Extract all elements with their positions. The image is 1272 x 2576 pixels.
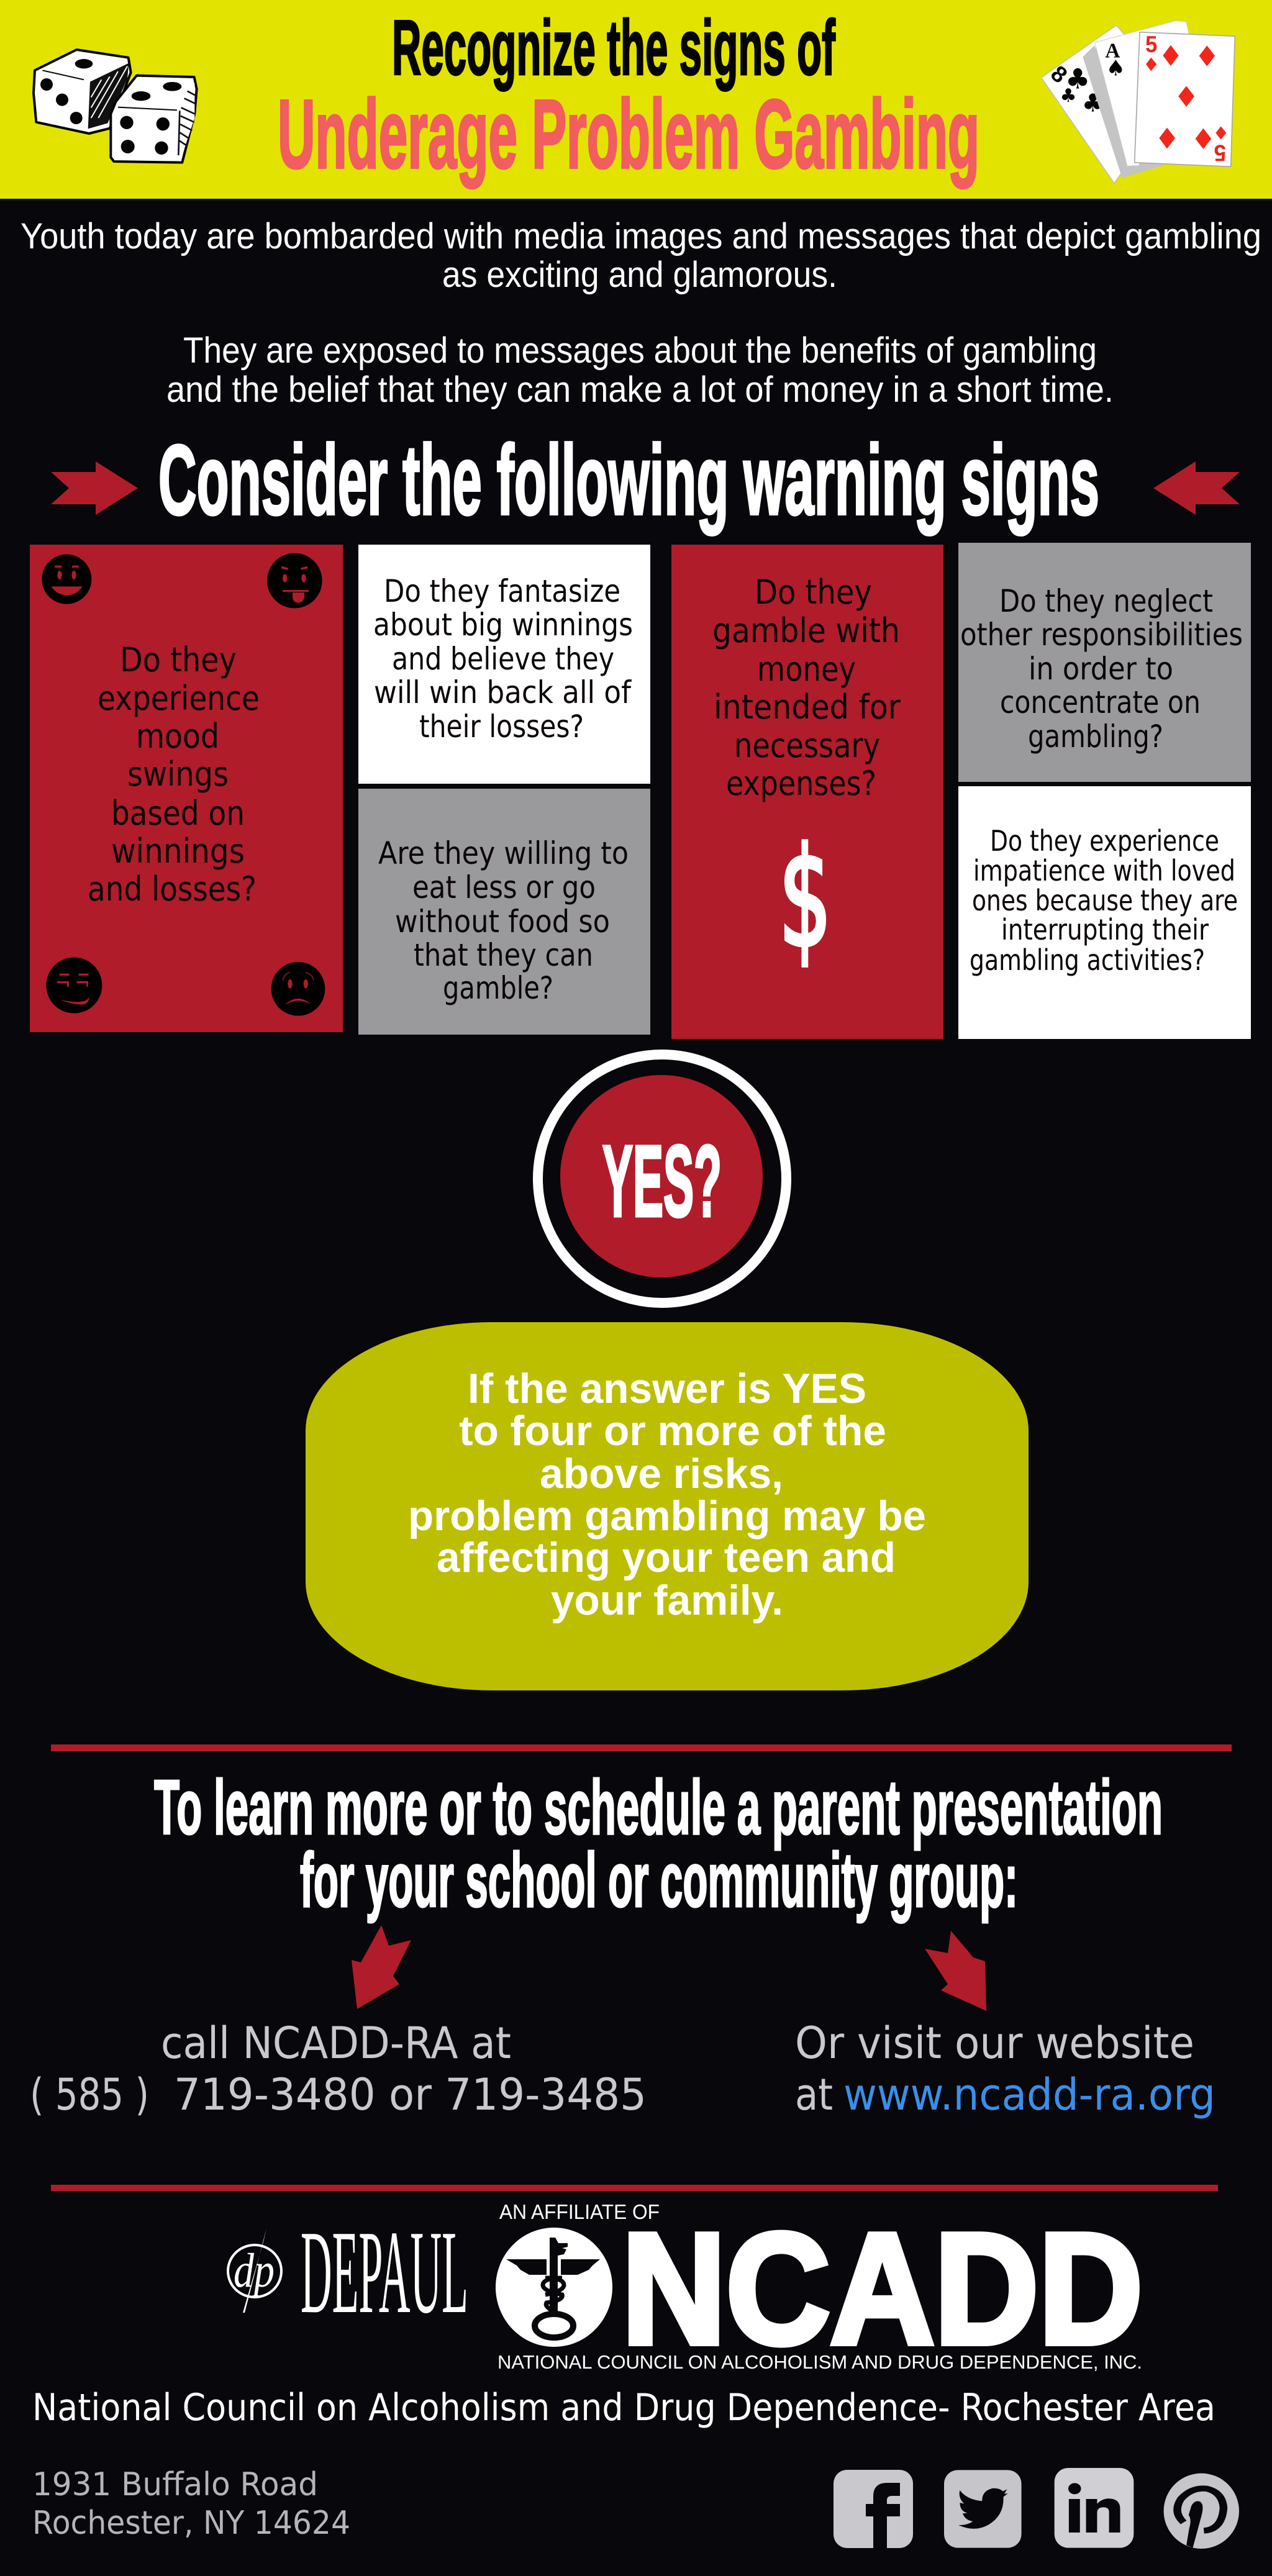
contact: website: at [795, 2069, 833, 2120]
icon: dice [34, 50, 197, 163]
question text: experience [98, 679, 260, 718]
question text [712, 573, 901, 803]
logo: NCADD: NCADD [622, 2200, 1143, 2377]
icon: playing cards [1042, 20, 1235, 183]
icon: twitter [944, 2470, 1022, 2548]
intro text block [20, 216, 1261, 410]
question text: about big winnings [373, 607, 633, 643]
icon: playing cards: 8 [1046, 60, 1072, 88]
question text [373, 573, 633, 745]
question text: will win back all of [374, 674, 632, 710]
YES badge [538, 1054, 786, 1303]
logo: DePaul [228, 2206, 468, 2338]
question text: Do they experience [990, 824, 1219, 858]
question text: necessary [734, 726, 880, 765]
callout: four or more risks [306, 1322, 1029, 1690]
callout text: above risks, [540, 1450, 783, 1497]
callout text: problem gambling may be [408, 1492, 926, 1540]
header banner [0, 0, 1272, 199]
arrow: heading right [1153, 461, 1240, 515]
icon: playing cards: ♠ [1106, 57, 1125, 81]
icon: playing cards: 5 [1145, 31, 1157, 57]
title line: Recognize the signs of: Recognize the signs of [392, 5, 835, 91]
icon: pinterest [1164, 2474, 1239, 2549]
question text [970, 824, 1238, 977]
question text: money [757, 650, 856, 689]
question text: Do they neglect [999, 583, 1213, 619]
question text: gambling? [1028, 719, 1163, 755]
icon: tongue out face [267, 553, 322, 608]
question text: interrupting their [1001, 913, 1209, 946]
contact: website: www.ncadd-ra.org [843, 2069, 1215, 2120]
icon: facebook [834, 2470, 913, 2548]
question text: gamble with [712, 611, 900, 650]
icon: laughing face [42, 555, 91, 604]
question text: without food so [395, 904, 610, 940]
address [32, 2466, 350, 2542]
panel: go without food [358, 789, 650, 1035]
heading: learn more [154, 1765, 1163, 1923]
logo: NCADD: AN AFFILIATE OF [499, 2200, 660, 2223]
panel: money for necessary expenses [671, 545, 943, 1039]
contact: phone: ( 585 ) [30, 2069, 149, 2120]
address: Rochester, NY 14624 [32, 2505, 350, 2542]
question text: and believe they [392, 641, 614, 677]
icon: dollar sign: $ [779, 819, 832, 977]
icon: smirking face [46, 958, 102, 1014]
question text [960, 583, 1243, 755]
question text [378, 835, 629, 1006]
icon: playing cards: A [1105, 40, 1120, 63]
logo: DePaul: dp [234, 2243, 275, 2297]
emblem: key and caduceus [496, 2228, 612, 2347]
question text: mood [136, 717, 219, 756]
question text: their losses? [419, 709, 584, 745]
arrow: down to phone [352, 1925, 411, 2009]
icon: playing cards: ♣ [1082, 89, 1104, 117]
question text: that they can [414, 937, 593, 973]
callout text: affecting your teen and [437, 1534, 896, 1581]
icon: playing cards: ♣ [1065, 63, 1090, 96]
question text: concentrate on [1000, 684, 1201, 720]
contact: phone [30, 2018, 647, 2120]
arrow: down to website [925, 1931, 986, 2011]
callout text [408, 1365, 926, 1624]
callout text: your family. [551, 1577, 783, 1624]
question text: based on [111, 794, 245, 833]
icon: playing cards: 5 [1214, 140, 1226, 166]
question text: and losses? [88, 869, 257, 909]
address: 1931 Buffalo Road [32, 2466, 318, 2503]
question text: Do they [755, 573, 872, 612]
question text: expenses? [726, 764, 876, 803]
panel: mood swings [30, 545, 343, 1032]
question text: gambling activities? [970, 943, 1205, 977]
contact: phone: call NCADD-RA at [161, 2018, 511, 2069]
question text [88, 640, 260, 909]
question text: eat less or go [412, 869, 596, 905]
arrow: heading left [51, 461, 138, 515]
panel: impatience with loved ones [958, 786, 1251, 1039]
question text: winnings [111, 832, 245, 871]
question text: in order to [1029, 651, 1173, 687]
YES badge: YES? [602, 1124, 722, 1238]
question text: swings [127, 755, 229, 794]
icon: linkedin [1055, 2468, 1133, 2548]
callout text: to four or more of the [459, 1407, 886, 1454]
question text: Are they willing to [378, 835, 629, 871]
panel: neglect responsibilities [958, 543, 1251, 782]
contact: website: Or visit our website [795, 2018, 1194, 2069]
callout text: If the answer is YES [468, 1365, 866, 1412]
icon: playing cards: ♣ [1060, 85, 1077, 107]
contact: phone: 719-3480 or 719-3485 [174, 2069, 647, 2120]
intro text block: They are exposed to messages about the benefits of gambling [183, 330, 1097, 371]
question text: gamble? [443, 970, 553, 1006]
icon: sad face [271, 962, 325, 1016]
question text: Do they fantasize [384, 573, 620, 609]
intro text block: as exciting and glamorous. [442, 255, 837, 295]
question text: Do they [120, 640, 237, 679]
question text: intended for [714, 687, 901, 727]
logo: NCADD: NATIONAL COUNCIL ON ALCOHOLISM AND DRUG DEPENDENCE, INC. [497, 2351, 1142, 2373]
text: DEPAUL [301, 2206, 468, 2338]
intro text block: and the belief that they can make a lot of money in a short time. [166, 370, 1114, 410]
panel: fantasize about winnings [358, 545, 650, 784]
contact: website [795, 2018, 1215, 2120]
